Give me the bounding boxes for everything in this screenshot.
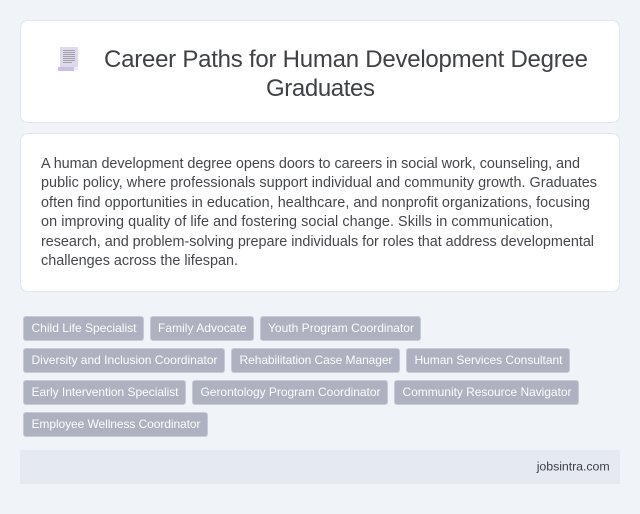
tag: Family Advocate: Family Advocate xyxy=(158,321,247,335)
tag: Employee Wellness Coordinator xyxy=(23,412,208,437)
tag: Community Resource Navigator xyxy=(394,380,579,405)
text block: description: research, and problem-solving prepare individuals for roles that address developmental xyxy=(41,234,594,250)
tag: Child Life Specialist: Child Life Specialist xyxy=(32,321,137,335)
text block: description: on improving quality of life and fostering social change. Skills in communication, xyxy=(41,214,553,230)
tag: Human Services Consultant: Human Services Consultant xyxy=(414,353,563,367)
text block: description: often find opportunities in education, healthcare, and nonprofit organizations, focusing xyxy=(41,195,590,211)
title xyxy=(104,46,588,102)
tag: Child Life Specialist xyxy=(23,316,144,341)
text block: description: A human development degree opens doors to careers in social work, counseling, and xyxy=(41,156,580,172)
title: Graduates xyxy=(266,75,375,102)
tag: Community Resource Navigator: Community Resource Navigator xyxy=(402,385,572,399)
tag: Youth Program Coordinator xyxy=(260,316,421,341)
tag: Gerontology Program Coordinator xyxy=(192,380,388,405)
tag: Rehabilitation Case Manager xyxy=(231,348,400,373)
tag: Rehabilitation Case Manager: Rehabilitation Case Manager xyxy=(240,353,392,367)
footer source text: jobsintra.com xyxy=(536,460,610,474)
tag: Gerontology Program Coordinator: Gerontology Program Coordinator xyxy=(200,385,380,399)
tag: Family Advocate xyxy=(150,316,254,341)
footer bar xyxy=(20,450,620,484)
text block: description: public policy, where professionals support individual and community growth. Graduates xyxy=(41,175,597,191)
tag: Early Intervention Specialist: Early Intervention Specialist xyxy=(32,385,179,399)
tag: Diversity and Inclusion Coordinator xyxy=(23,348,225,373)
text block: description: challenges across the lifespan. xyxy=(41,253,238,269)
tag: Early Intervention Specialist xyxy=(23,380,186,405)
tag: Youth Program Coordinator: Youth Program Coordinator xyxy=(268,321,414,335)
tag: Diversity and Inclusion Coordinator: Diversity and Inclusion Coordinator xyxy=(32,353,218,367)
tag: Employee Wellness Coordinator: Employee Wellness Coordinator xyxy=(32,417,200,431)
text block: description xyxy=(41,156,597,269)
panel: header card xyxy=(20,20,620,123)
title: Career Paths for Human Development Degree xyxy=(104,46,588,73)
panel: description card xyxy=(20,133,620,292)
icon: document scroll xyxy=(58,47,78,71)
tag: Human Services Consultant xyxy=(406,348,570,373)
